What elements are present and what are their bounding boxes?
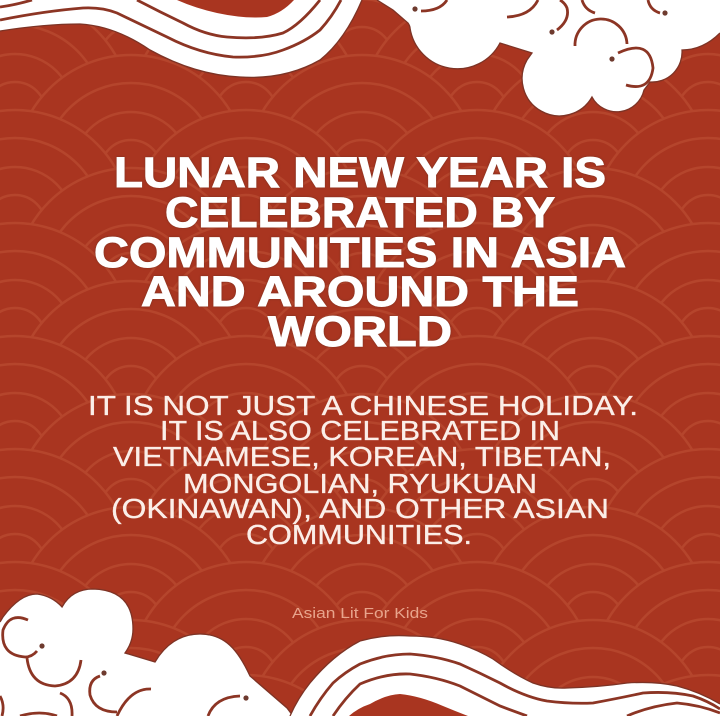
bottom-right wave	[290, 636, 720, 716]
footer credit: Asian Lit For Kids	[292, 606, 428, 622]
body text: COMMUNITIES.	[246, 519, 472, 550]
body text: VIETNAMESE, KOREAN, TIBETAN,	[113, 441, 611, 472]
body text: (OKINAWAN), AND OTHER ASIAN	[111, 493, 609, 524]
bottom-left cloud	[0, 589, 293, 716]
headline	[94, 149, 626, 356]
headline: CELEBRATED BY	[165, 189, 555, 237]
headline: AND AROUND THE	[141, 268, 579, 316]
top-left wave	[0, 0, 362, 77]
body text: IT IS ALSO CELEBRATED IN	[160, 415, 560, 446]
body text: IT IS NOT JUST A CHINESE HOLIDAY.	[88, 390, 638, 421]
top-right cloud	[377, 0, 720, 116]
headline: WORLD	[268, 308, 452, 356]
headline: COMMUNITIES IN ASIA	[94, 229, 626, 277]
headline: LUNAR NEW YEAR IS	[114, 149, 606, 197]
body text: MONGOLIAN, RYUKUAN	[183, 468, 537, 499]
body text	[88, 390, 638, 550]
